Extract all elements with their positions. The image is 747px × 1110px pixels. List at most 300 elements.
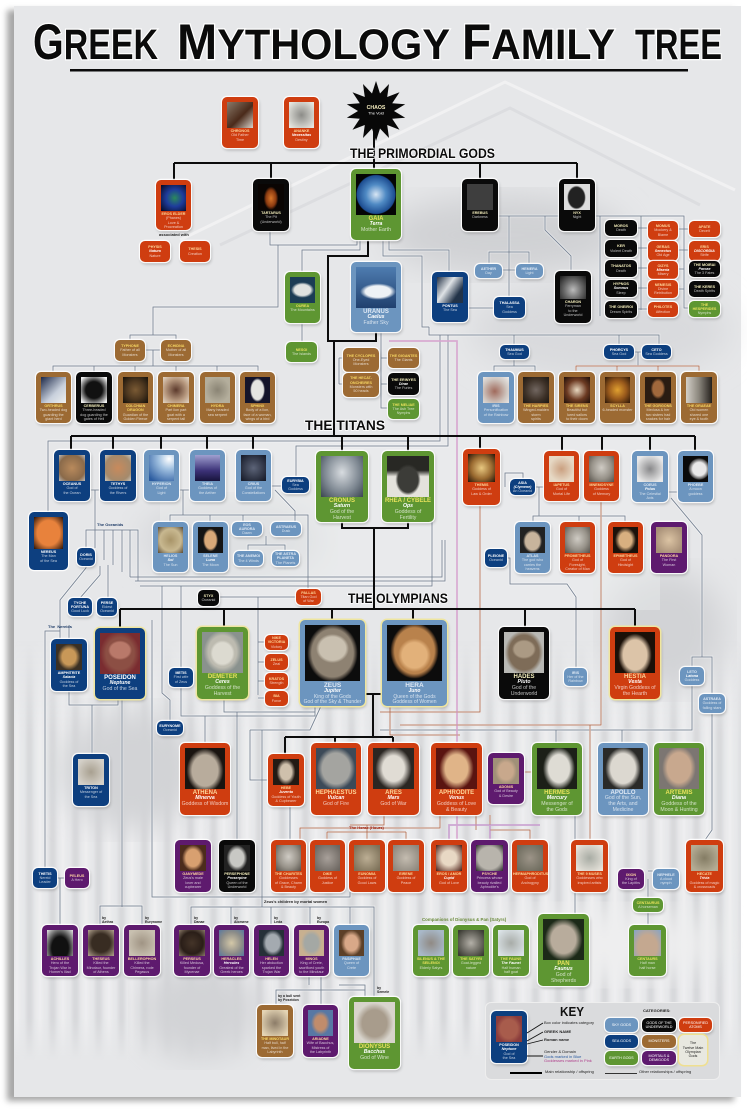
card: Nephele bbox=[653, 869, 679, 889]
swatch: earth gods bbox=[605, 1051, 638, 1065]
card: Gaia: Terra bbox=[370, 221, 382, 227]
card: Eros Amor bbox=[431, 840, 467, 892]
label: the horae: The Horae (Hours) bbox=[349, 825, 384, 830]
label: by Aethra bbox=[102, 916, 114, 924]
card: Artemis: Goddess of the bbox=[661, 801, 697, 807]
card: Hecatoncheires: 50 heads bbox=[353, 389, 369, 393]
card: Hera: Goddess of Women bbox=[392, 699, 437, 705]
card: Ourea: The Mountains bbox=[290, 308, 315, 312]
card: Erebus bbox=[462, 179, 498, 231]
card: Achilles: Hero of the bbox=[51, 961, 69, 965]
card: Oceanus: the Ocean bbox=[63, 491, 80, 495]
card: Nereus: The Man bbox=[41, 554, 56, 558]
card: Hermes bbox=[532, 743, 582, 815]
card: Perseus: founder of bbox=[184, 966, 200, 970]
label: by Europa: by bbox=[317, 916, 321, 920]
categories heading: CATEGORIES: bbox=[643, 1008, 670, 1013]
card: Themis: Law & Order bbox=[471, 492, 492, 496]
card: Leto: Latona bbox=[686, 674, 698, 678]
swatch: personified atoms bbox=[679, 1018, 712, 1032]
label: by Danae: Danae bbox=[194, 920, 205, 924]
card: Hermaphroditus: God of bbox=[524, 876, 536, 880]
card: Selene: SELENE bbox=[203, 554, 218, 558]
card: Coeus bbox=[632, 451, 668, 502]
card: Chimera: serpent tail bbox=[167, 417, 185, 421]
card: Styx: Oceanid bbox=[202, 598, 215, 602]
card: Hestia: Vesta bbox=[628, 679, 642, 685]
card: Uranus: Caelus bbox=[367, 314, 384, 320]
label: associated with: associated with bbox=[159, 232, 189, 237]
card: Persephone: PERSEPHONE bbox=[224, 872, 250, 876]
card: Athena: Goddess of Wisdom bbox=[182, 801, 228, 807]
card: Satyrs: nature bbox=[466, 966, 476, 970]
card: Ceto: Sea Goddess bbox=[645, 352, 668, 356]
key heading: KEY bbox=[560, 1004, 584, 1019]
card: Silenus bbox=[413, 925, 449, 976]
card: Tartarus: The Pit bbox=[265, 215, 277, 219]
card: Helios: HELIOS bbox=[164, 554, 177, 558]
card: Eros Amor: Cupid bbox=[444, 876, 454, 880]
card: Pallas: PALLAS bbox=[301, 591, 316, 595]
card: Cronus bbox=[316, 451, 368, 522]
card: Fauns: THE FAUNS bbox=[501, 957, 521, 961]
card: Selene: The Moon bbox=[202, 563, 219, 567]
card: Nemesis: Retribution bbox=[654, 291, 672, 295]
card: Geras: Old Age bbox=[656, 253, 670, 257]
annotation: box color: Box color indicates category bbox=[544, 1020, 594, 1025]
card: Dike: Justice bbox=[322, 881, 333, 885]
card: Echidna bbox=[161, 340, 191, 361]
label: by a bull sent by Poseidon bbox=[278, 994, 300, 1002]
card: Fauns: half goat bbox=[504, 970, 518, 974]
card: Hephaestus: HEPHAESTUS bbox=[315, 790, 356, 796]
card: Poseidon: Neptune bbox=[110, 680, 130, 686]
card: Gigantes: The Giants bbox=[394, 358, 413, 362]
card: The Charites bbox=[271, 840, 306, 892]
key sample card: the Sea bbox=[503, 1056, 515, 1060]
card: Uranus: URANUS bbox=[363, 309, 389, 315]
card: Orthrus: Two-headed dog bbox=[40, 408, 67, 412]
card: Aphrodite bbox=[431, 743, 482, 815]
card: Nephele: nymph bbox=[660, 881, 672, 885]
card: Zeus: ZEUS bbox=[324, 682, 341, 689]
card: Gaia bbox=[351, 169, 401, 240]
swatch: sky gods: SKY GODS bbox=[612, 1023, 631, 1027]
card: Ares: God of War bbox=[380, 801, 407, 807]
label: by Aethra: Aethra bbox=[102, 920, 113, 924]
card: Graeae: shared one bbox=[690, 413, 708, 417]
card: Artemis: Diana bbox=[672, 795, 686, 801]
card: Peleus bbox=[65, 868, 89, 888]
card: Centaurus: A horseman bbox=[638, 905, 658, 909]
card: Phoebe: A moon bbox=[689, 487, 702, 491]
card: Ananke bbox=[284, 97, 319, 148]
card: Hyperion: HYPERION bbox=[152, 482, 171, 486]
card: Hecate: Trivia bbox=[700, 876, 709, 880]
card: Moros: MOROS bbox=[614, 224, 628, 228]
card: Thanatos: Death bbox=[616, 268, 626, 272]
label: by Danae: by bbox=[194, 916, 198, 920]
swatch: personified atoms: PERSONIFIED ATOMS bbox=[683, 1021, 708, 1029]
card: Colchian Dragon: Guardian of the bbox=[123, 413, 148, 417]
card: Leto bbox=[680, 667, 704, 685]
card: Artemis: Moon & Hunting bbox=[660, 807, 698, 813]
card: Dionysus: God of Wine bbox=[360, 1055, 389, 1061]
card: Theseus: Killed the bbox=[93, 961, 109, 965]
label: by Eurynome: by bbox=[145, 916, 149, 920]
card: Perseus: Mycenae bbox=[185, 970, 199, 974]
card: Ganymede: lover and bbox=[185, 881, 201, 885]
card: Apate: Deceit bbox=[699, 229, 710, 233]
card: Nyx bbox=[559, 179, 595, 231]
card: Theseus: of Athens bbox=[93, 970, 109, 974]
swatch: sky gods bbox=[605, 1018, 638, 1032]
card: Pasiphae: Queen of bbox=[344, 961, 359, 965]
card: Tethys: the Rivers bbox=[110, 491, 126, 495]
key sample card bbox=[491, 1011, 527, 1063]
card: Perseus: PERSEUS bbox=[183, 957, 201, 961]
card: Cyclopes: THE CYCLOPES bbox=[347, 354, 375, 358]
card: Demeter: Goddess of the bbox=[205, 685, 240, 691]
card: Minotaur: THE MINOTAUR bbox=[261, 1037, 289, 1041]
card: Gaia: GAIA bbox=[368, 216, 384, 222]
card: Iapetus bbox=[544, 451, 579, 501]
card: Ourea bbox=[285, 272, 320, 323]
card: Charon: to the bbox=[568, 309, 578, 313]
card: Coeus: The Celestial bbox=[639, 492, 661, 496]
card: Hesperides: Nymphs bbox=[698, 311, 711, 315]
card: Orthrus bbox=[36, 372, 71, 423]
card: Graeae: Old women bbox=[690, 408, 708, 412]
card: Physis: Natura bbox=[149, 249, 161, 253]
card: Phorcys: Sea God bbox=[612, 352, 626, 356]
card: Sphinx: SPHINX bbox=[251, 404, 264, 408]
card: Persephone: Queen of the bbox=[226, 881, 248, 885]
card: Themis: Goddess of bbox=[472, 487, 491, 491]
card: Eunomia bbox=[349, 840, 385, 892]
swatch: mortals and demigods: MORTALS & DEMIGODS bbox=[649, 1054, 669, 1062]
card: Pontus bbox=[432, 272, 468, 322]
card: Hecate: HECATE bbox=[697, 872, 712, 876]
card: Zeus bbox=[300, 620, 365, 706]
card: Tyche: Good Luck bbox=[71, 609, 89, 613]
card: Dionysus bbox=[349, 997, 400, 1069]
card: Hecatoncheires: Monsters with bbox=[350, 385, 372, 389]
swatch: gods of the underworld: GODS OF THE UNDERWORLD bbox=[646, 1021, 672, 1029]
card: Demeter: Ceres bbox=[215, 679, 230, 685]
card: Aether: AETHER bbox=[481, 267, 496, 271]
card: Nike: Victory bbox=[271, 645, 282, 649]
card: Dike: Goddess of bbox=[318, 876, 337, 880]
card: Hecate: & crossroads bbox=[694, 885, 715, 889]
card: Mnemosyne: of Memory bbox=[593, 492, 610, 496]
card: Adonis bbox=[488, 753, 524, 804]
card: Erebus: Darkness bbox=[472, 215, 488, 219]
panel: key bbox=[486, 1003, 719, 1079]
card: Styx bbox=[198, 590, 219, 606]
card: Oneiroi: Dream Spirits bbox=[610, 310, 632, 314]
card: Helen bbox=[254, 925, 289, 976]
label: by Leda: by bbox=[274, 916, 278, 920]
card: Iris: of the Rainbow bbox=[484, 413, 508, 417]
card: Bia: Force bbox=[272, 698, 281, 702]
card: Fauns: Half human bbox=[502, 966, 520, 970]
card: Orthrus: ORTHRUS bbox=[44, 404, 63, 408]
card: Thanatos bbox=[605, 260, 637, 277]
card: Harpies: THE HARPIES bbox=[524, 404, 548, 408]
card: Astraea: ASTRAEA bbox=[703, 697, 721, 701]
card: Iapetus: Mortal Life bbox=[553, 492, 570, 496]
card: Helen: Her abduction bbox=[260, 961, 283, 965]
card: Fauns bbox=[493, 925, 529, 976]
card: Rhea: Fertility bbox=[400, 515, 416, 521]
card: Zelus: ZELUS bbox=[270, 658, 283, 662]
card: Metis bbox=[169, 668, 193, 687]
swatch: monsters: MONSTERS bbox=[649, 1039, 669, 1043]
card: Pallas: Titan God bbox=[300, 595, 317, 599]
card: Minotaur: man, lived in the bbox=[262, 1046, 288, 1050]
card: Apollo: God of the Sun, bbox=[605, 795, 641, 801]
card: Bellerophon: Chimera, rode bbox=[130, 966, 154, 970]
card: Thalassa: THALASSA bbox=[499, 301, 520, 305]
card: Colchian Dragon: Golden Fleece bbox=[124, 417, 147, 421]
card: Erinyes: Dirae bbox=[399, 382, 408, 386]
label: the nereids: The Nereids bbox=[48, 624, 72, 629]
card: Thaumas: Sea God bbox=[507, 352, 522, 356]
card: Momus bbox=[648, 221, 678, 240]
legend: main relationship bbox=[510, 1072, 542, 1074]
card: Philotes: Affection bbox=[656, 310, 670, 314]
card: Persephone: Proserpine bbox=[227, 876, 247, 880]
card: Hypnos: HYPNOS bbox=[613, 282, 629, 286]
card: Pleione: Oceanid bbox=[489, 558, 503, 562]
card: Crius: CRIUS bbox=[248, 482, 259, 486]
card: Gigantes: THE GIGANTES bbox=[390, 354, 417, 358]
card: Eros Amor: God of Love bbox=[439, 881, 459, 885]
card: Nemesis: Divine bbox=[658, 287, 668, 291]
card: Asia: An Oceanid bbox=[513, 489, 532, 493]
card: Asia: (Clymene) bbox=[514, 485, 531, 489]
card: Hebe: Juventa bbox=[279, 790, 293, 794]
card: Ares: Mars bbox=[387, 795, 400, 801]
card: Eros Elder bbox=[156, 180, 191, 230]
card: Perse: Eldest bbox=[102, 605, 112, 609]
card: Hermes: the Gods bbox=[546, 807, 568, 813]
card: Demeter: Harvest bbox=[214, 691, 231, 697]
card: The Charites: of Grace, Charm bbox=[275, 881, 302, 885]
card: Hypnos: Somnus bbox=[614, 286, 628, 290]
card: Hyperion: God of bbox=[156, 486, 167, 490]
card: Mnemosyne: MNEMOSYNE bbox=[589, 483, 614, 487]
card: Satyrs: THE SATYRI bbox=[460, 957, 482, 961]
title: GREEK bbox=[33, 14, 158, 70]
card: Erinyes: THE ERINYES bbox=[391, 378, 416, 382]
card: Erebus: EREBUS bbox=[472, 211, 488, 215]
card: Aphrodite: Goddess of Love bbox=[437, 801, 476, 807]
card: Gigantes bbox=[388, 348, 419, 368]
card: Cronus: God of the bbox=[330, 509, 354, 515]
card: Astraeus: ASTRAEUS bbox=[276, 525, 296, 529]
key sample card: Neptune bbox=[502, 1047, 516, 1051]
card: Eros Amor: EROS / AMOR bbox=[437, 872, 461, 876]
card: Thalassa: Sea bbox=[506, 305, 513, 309]
card: Cronus: CRONUS bbox=[329, 498, 355, 504]
card: Themis: THEMIS bbox=[475, 483, 488, 487]
card: Hebe: Goddess of Youth bbox=[271, 795, 301, 799]
swatch: sea gods: SEA GODS bbox=[612, 1039, 631, 1043]
card: Eurybia: Goddess bbox=[288, 487, 303, 491]
card: Ananke: Destiny bbox=[295, 138, 308, 142]
card: Amphitrite: Goddess of bbox=[60, 680, 78, 684]
card: Hesperides: THE HESPERIDES bbox=[693, 303, 716, 311]
card: Atlas: ATLAS bbox=[526, 554, 539, 558]
card: Achilles bbox=[42, 925, 78, 976]
card: Perse: Oceanid bbox=[100, 609, 114, 613]
card: Ganymede bbox=[175, 840, 211, 892]
card: Eirene: EIRENE bbox=[399, 872, 413, 876]
card: Iris bbox=[478, 372, 514, 423]
annotation: gender and domain: Goddesses marked in Pink bbox=[544, 1058, 592, 1063]
card: Ganymede: cupbearer bbox=[185, 885, 201, 889]
card: Selene: Luna bbox=[206, 558, 215, 562]
card: Hestia: Virgin Goddess of bbox=[614, 685, 656, 691]
card: Gorgons: snakes for hair bbox=[646, 417, 670, 421]
card: Tethys bbox=[100, 450, 136, 501]
card: Apollo: APOLLO bbox=[610, 790, 636, 796]
card: The Moirai: THE MOIRAI bbox=[694, 263, 715, 267]
card: Hebe bbox=[268, 754, 304, 806]
card: Chronos bbox=[222, 97, 258, 148]
card: Eurybia bbox=[282, 477, 309, 493]
card: Hephaestus bbox=[311, 743, 361, 815]
card: Thalassa: Goddess bbox=[502, 310, 517, 314]
card: Epimetheus: Hindsight bbox=[618, 563, 633, 567]
card: Asia: ASIA bbox=[518, 481, 527, 485]
card: Epimetheus: EPIMETHEUS bbox=[614, 554, 637, 558]
card: Centaurus bbox=[633, 898, 663, 912]
card: Selene bbox=[193, 522, 228, 572]
card: Aurora: Dawn bbox=[242, 531, 252, 535]
heading: the olympians: THE OLYMPIANS bbox=[348, 590, 448, 606]
card: Pleione: PLEIONE bbox=[488, 554, 504, 558]
card: Centaurs: half horse bbox=[639, 966, 656, 970]
card: Dionysus: DIONYSUS bbox=[359, 1044, 390, 1050]
card: Apate: APATE bbox=[699, 225, 710, 229]
swatch: twelve olympians: Olympian bbox=[685, 1050, 701, 1054]
card: Cronus: Saturn bbox=[334, 503, 350, 509]
card: Moros bbox=[605, 220, 637, 236]
card: Chronos: Old Father bbox=[231, 133, 249, 137]
card: Echidna: Monsters bbox=[168, 353, 184, 357]
card: Astra Planeta bbox=[272, 551, 299, 566]
card: Poseidon: POSEIDON bbox=[104, 675, 136, 681]
card: Apate bbox=[689, 221, 720, 237]
card: Pasiphae: Crete bbox=[347, 966, 356, 970]
card: Eunomia: EUNOMIA bbox=[358, 872, 376, 876]
card: Hydra: sea serpent bbox=[208, 413, 227, 417]
card: Geras: GERAS bbox=[656, 245, 670, 249]
card: Demeter: DEMETER bbox=[208, 674, 237, 680]
card: Momus: Blame bbox=[658, 233, 668, 237]
card: Artemis bbox=[654, 743, 704, 815]
card: Chimera: goat with a bbox=[167, 413, 185, 417]
card: Aether: Day bbox=[485, 271, 492, 275]
card: Amphitrite bbox=[51, 639, 87, 691]
card: Amphitrite: the Sea bbox=[63, 684, 75, 688]
card: Hyperion: Light bbox=[158, 491, 166, 495]
card: Hephaestus: Vulcan bbox=[328, 795, 344, 801]
card: Styx: STYX bbox=[204, 594, 213, 598]
card: Colchian Dragon: COLCHIAN DRAGON bbox=[126, 404, 145, 412]
card: Hecatoncheires: THE HECAT-ONCHEIRES bbox=[350, 376, 372, 385]
card: Apollo: Medicine bbox=[613, 807, 633, 813]
swatch: sea gods bbox=[605, 1035, 638, 1048]
card: Helen: Trojan War bbox=[263, 970, 280, 974]
card: Tyche: TYCHE bbox=[74, 601, 86, 605]
card: Perse bbox=[97, 598, 117, 616]
card: Minotaur: Labyrinth bbox=[267, 1050, 283, 1054]
card: Athena: Minerva bbox=[195, 795, 215, 801]
card: Harpies: storm bbox=[531, 413, 541, 417]
swatch: twelve olympians: Gods bbox=[689, 1054, 697, 1058]
card: Hyperion bbox=[144, 450, 179, 501]
card: Meliae bbox=[388, 399, 419, 419]
card: Ixion: IXION bbox=[626, 873, 636, 877]
card: Pontus: The Sea bbox=[443, 308, 457, 312]
card: Ker bbox=[605, 240, 637, 257]
card: Satyrs: Goat-legged bbox=[461, 961, 481, 965]
legend text: main relationship: Main relationship / offspring bbox=[545, 1069, 594, 1074]
card: Chimera bbox=[158, 372, 194, 423]
card: Eirene: Peace bbox=[401, 881, 411, 885]
card: Themis bbox=[463, 449, 500, 505]
card: Eurybia: Sea bbox=[292, 483, 299, 487]
card: Astraeus: Dusk bbox=[282, 529, 290, 533]
card: Astraeus bbox=[271, 522, 301, 536]
card: Eirene bbox=[388, 840, 424, 892]
card: Harpies: spirits bbox=[531, 417, 541, 421]
card: Coeus: Polus bbox=[645, 487, 655, 491]
card: Hecatoncheires bbox=[343, 373, 379, 397]
card: Thetis bbox=[33, 868, 57, 888]
card: Peleus: PELEUS bbox=[70, 874, 84, 878]
annotation: gender and domain: Gender & Domain bbox=[544, 1049, 576, 1054]
card: Coeus: Axis bbox=[647, 496, 653, 500]
card: Ker: KER bbox=[617, 244, 625, 248]
card: Pan: God of bbox=[556, 972, 571, 978]
card: Artemis: ARTEMIS bbox=[666, 790, 692, 796]
card: Nephele: A cloud bbox=[660, 877, 672, 881]
card: Pasiphae: PASIPHAE bbox=[342, 957, 361, 961]
heading: the primordial gods: THE PRIMORDIAL GODS bbox=[350, 145, 495, 161]
card: Crius bbox=[236, 450, 271, 501]
card: Chronos: CHRONOS bbox=[231, 129, 249, 133]
card: Thetis: Leader bbox=[39, 880, 51, 884]
card: Ariadne: ARIADNE bbox=[312, 1037, 329, 1041]
card: Rhea bbox=[382, 451, 434, 522]
card: Thanatos: THANATOS bbox=[611, 264, 631, 268]
card: Bia bbox=[265, 691, 288, 706]
card: Nesoi: The Islands bbox=[292, 352, 311, 356]
card: Anemoi bbox=[234, 551, 263, 566]
label: by Aethra: by bbox=[102, 916, 106, 920]
card: The Keres bbox=[689, 281, 720, 297]
card: Hypnos: Sleep bbox=[616, 291, 626, 295]
card: Helios: The Sun bbox=[164, 563, 177, 567]
card: Scylla bbox=[600, 372, 635, 423]
card: Phoebe: PHOEBE bbox=[688, 483, 703, 487]
card: Eunomia: Goddess of bbox=[358, 876, 376, 880]
